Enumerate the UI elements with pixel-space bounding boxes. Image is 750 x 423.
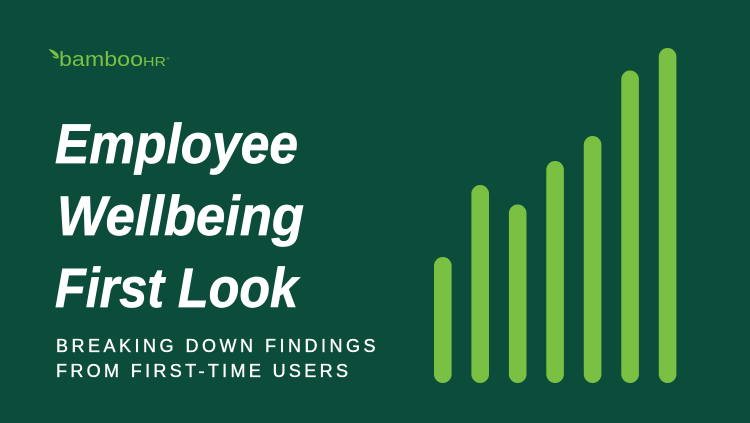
subtitle: [56, 336, 376, 381]
logo wordmark: HR: [143, 54, 166, 69]
logo wordmark: [59, 49, 170, 71]
title: Wellbeing: [57, 184, 304, 247]
logo: BambooHR: [48, 49, 170, 71]
subtitle: BREAKING DOWN FINDINGS: [56, 336, 376, 356]
title: First Look: [55, 256, 301, 319]
logo wordmark: bamboo: [59, 49, 143, 71]
title: Employee: [55, 112, 298, 175]
subtitle: FROM FIRST-TIME USERS: [56, 361, 348, 381]
bar chart: [434, 48, 676, 383]
logo wordmark: ®: [166, 56, 170, 61]
title: [55, 112, 304, 319]
icon: bamboo leaves: [48, 49, 59, 58]
